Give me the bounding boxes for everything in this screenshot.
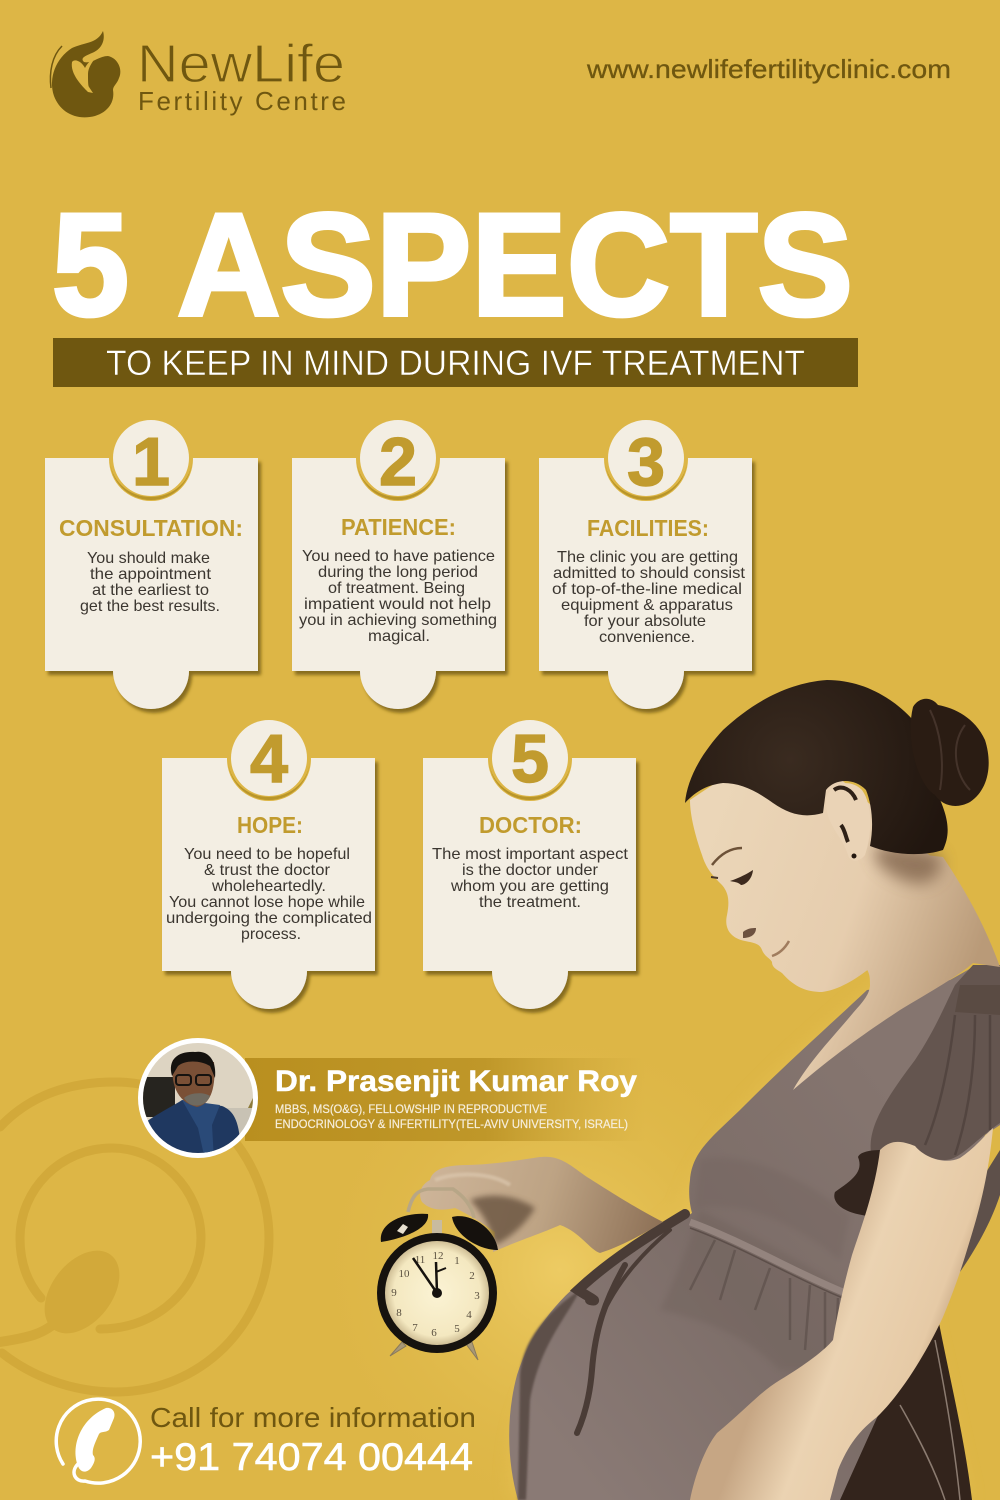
panel: hope: & trust the doctor xyxy=(204,862,331,879)
panel: facilities: 3 xyxy=(627,424,665,500)
panel: consultation: CONSULTATION: xyxy=(59,515,243,541)
panel: patience: magical. xyxy=(368,628,430,645)
panel: facilities: admitted to should consist xyxy=(553,565,746,582)
panel: facilities: FACILITIES: xyxy=(587,515,709,541)
soft glow around figure xyxy=(509,960,970,1500)
dress shading xyxy=(660,1210,845,1370)
clock numerals: 7 xyxy=(412,1322,418,1334)
title: 5 xyxy=(52,183,129,346)
panel: patience: of treatment. Being xyxy=(328,580,465,597)
clock numerals: 12 xyxy=(432,1250,444,1262)
doctor qualifications xyxy=(275,1102,628,1131)
panel: consultation: 1 xyxy=(132,424,170,500)
logo wordmark: NewLife xyxy=(137,34,345,94)
subtitle band: TO KEEP IN MIND DURING IVF TREATMENT xyxy=(106,344,805,383)
website url: www.newlifefertilityclinic.com xyxy=(586,54,951,84)
panel: patience: you in achieving something xyxy=(299,612,497,629)
panel: hope: You cannot lose hope while xyxy=(169,894,365,911)
panel: consultation: get the best results. xyxy=(80,598,220,615)
head xyxy=(685,680,989,992)
panel: hope: You need to be hopeful xyxy=(184,846,350,863)
face xyxy=(690,770,935,992)
panel: doctor: the treatment. xyxy=(479,894,581,911)
panel: patience: 2 xyxy=(379,424,417,500)
panel: consultation xyxy=(45,417,258,709)
title: ASPECTS xyxy=(177,183,853,346)
clock numerals xyxy=(391,1250,480,1339)
earring xyxy=(852,854,856,858)
panel: patience: during the long period xyxy=(318,564,478,581)
panel: facilities: The clinic you are getting xyxy=(557,549,738,566)
hair bun xyxy=(911,699,989,806)
panel: hope: process. xyxy=(241,926,301,943)
ear xyxy=(826,783,870,861)
dress tie xyxy=(577,1214,685,1433)
clock numerals: 3 xyxy=(474,1290,480,1302)
pleats xyxy=(690,1240,838,1380)
panel: doctor: is the doctor under xyxy=(462,862,599,879)
doctor portrait xyxy=(138,1038,258,1160)
back of dress xyxy=(825,1150,1000,1500)
clock numerals: 8 xyxy=(396,1307,402,1319)
doctor name: Dr. Prasenjit Kumar Roy xyxy=(275,1065,637,1098)
neck shadow xyxy=(875,845,941,884)
logo icon xyxy=(50,31,120,117)
clock numerals: 2 xyxy=(469,1270,475,1282)
palm shadow xyxy=(470,1196,535,1245)
dress xyxy=(509,965,1000,1500)
lips xyxy=(772,941,789,956)
panel: facilities xyxy=(539,417,752,709)
panel: hope: HOPE: xyxy=(237,812,303,838)
panel: facilities: of top-of-the-line medical xyxy=(552,581,742,598)
eye xyxy=(730,870,753,885)
handle xyxy=(408,1189,474,1218)
clock numerals: 10 xyxy=(398,1268,410,1280)
panel: hope: 4 xyxy=(250,721,288,797)
panel: hope: wholeheartedly. xyxy=(211,878,326,895)
panel: hope: undergoing the complicated xyxy=(166,910,372,927)
panel: doctor xyxy=(423,717,636,1009)
arm xyxy=(690,1128,993,1500)
feet xyxy=(390,1342,406,1356)
brow xyxy=(712,848,742,865)
logo xyxy=(50,31,346,117)
panel: patience: impatient would not help xyxy=(304,596,491,613)
panel: consultation: the appointment xyxy=(90,566,212,583)
call to action: Call for more information xyxy=(150,1402,476,1433)
panel: consultation: at the earliest to xyxy=(92,582,209,599)
alarm clock xyxy=(377,1189,498,1360)
forearm and hand xyxy=(420,1157,663,1253)
panel: hope xyxy=(162,717,375,1009)
phone number: +91 74074 00444 xyxy=(150,1436,473,1479)
clock numerals: 1 xyxy=(454,1255,460,1267)
doctor qualifications: MBBS, MS(O&G), FELLOWSHIP IN REPRODUCTIVE xyxy=(275,1102,547,1116)
panel: facilities: for your absolute xyxy=(584,613,706,630)
clock numerals: 6 xyxy=(431,1327,437,1339)
call to action xyxy=(150,1402,476,1479)
doctor credentials band xyxy=(245,1058,645,1141)
panel: doctor: The most important aspect xyxy=(432,846,629,863)
woman xyxy=(377,680,1000,1500)
panel: patience: You need to have patience xyxy=(302,548,495,565)
panel: patience: PATIENCE: xyxy=(341,514,456,540)
panel: consultation: You should make xyxy=(87,550,210,567)
hair xyxy=(685,680,948,854)
clock body xyxy=(377,1233,497,1353)
phone icon xyxy=(56,1399,140,1483)
panel: facilities: convenience. xyxy=(599,629,695,646)
chest and neck xyxy=(793,850,1000,1090)
panel: doctor: 5 xyxy=(511,721,549,797)
watermark: sperm and rings xyxy=(0,1082,269,1392)
waistband xyxy=(690,1222,843,1292)
clock numerals: 11 xyxy=(415,1254,425,1266)
panel: doctor: DOCTOR: xyxy=(479,812,582,838)
clock numerals: 4 xyxy=(466,1309,472,1321)
clock numerals: 5 xyxy=(454,1323,460,1335)
bells xyxy=(381,1214,428,1242)
nose shadow xyxy=(743,928,756,938)
logo tagline: Fertility Centre xyxy=(138,86,346,116)
panel: facilities: equipment & apparatus xyxy=(561,597,733,614)
clock hands xyxy=(413,1258,437,1293)
clock numerals: 9 xyxy=(391,1287,397,1299)
panel: doctor: whom you are getting xyxy=(450,878,609,895)
sleeve xyxy=(871,965,1000,1160)
panel: patience xyxy=(292,417,505,709)
armpit shadow xyxy=(834,1150,881,1216)
doctor qualifications: ENDOCRINOLOGY & INFERTILITY(TEL-AVIV UNIVERSITY, ISRAEL) xyxy=(275,1117,628,1131)
